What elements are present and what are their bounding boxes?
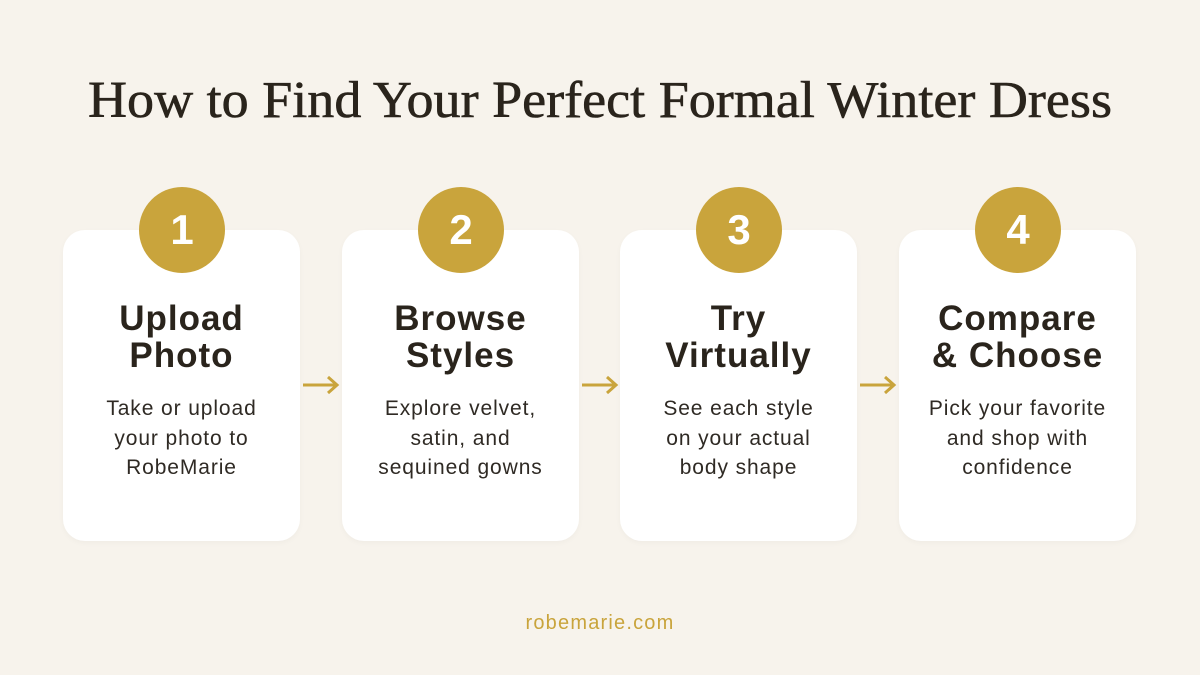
text 4: and shop with bbox=[947, 426, 1088, 450]
heading 3 bbox=[665, 299, 812, 375]
arrow 3 bbox=[860, 376, 896, 394]
heading 1 bbox=[119, 299, 244, 375]
text 4: confidence bbox=[962, 456, 1073, 479]
badge 1: 1 bbox=[170, 206, 194, 253]
text 1: RobeMarie bbox=[126, 456, 237, 479]
panel: step 4 bbox=[899, 230, 1136, 541]
heading 4: & Choose bbox=[932, 336, 1103, 375]
text 2 bbox=[378, 397, 543, 479]
text 3 bbox=[663, 397, 814, 479]
arrow 2 bbox=[582, 376, 618, 394]
text 4 bbox=[929, 397, 1106, 479]
badge 4 bbox=[975, 187, 1061, 273]
heading 2 bbox=[394, 299, 527, 375]
badge 3 bbox=[696, 187, 782, 273]
panel: step 1 bbox=[63, 230, 300, 541]
panel: step 3 bbox=[620, 230, 857, 541]
text 3: body shape bbox=[680, 456, 797, 479]
arrow 1 bbox=[303, 376, 340, 394]
text 4: Pick your favorite bbox=[929, 397, 1106, 420]
panel: step 2 bbox=[342, 230, 579, 541]
text 1: Take or upload bbox=[106, 397, 257, 420]
badge 2 bbox=[418, 187, 504, 273]
heading 4 bbox=[932, 299, 1103, 375]
footer: robemarie.com bbox=[526, 612, 674, 634]
text 2: Explore velvet, bbox=[385, 397, 536, 420]
heading 4: Compare bbox=[938, 299, 1097, 338]
heading 1: Photo bbox=[129, 336, 234, 375]
badge 2: 2 bbox=[449, 206, 473, 253]
badge 3: 3 bbox=[727, 206, 751, 253]
heading 2: Styles bbox=[406, 336, 515, 375]
badge 1 bbox=[139, 187, 225, 273]
badge 4: 4 bbox=[1006, 206, 1030, 253]
text 1 bbox=[106, 397, 257, 479]
text 3: on your actual bbox=[666, 426, 811, 450]
text 1: your photo to bbox=[114, 426, 249, 450]
heading 2: Browse bbox=[394, 299, 527, 338]
text 2: satin, and bbox=[410, 426, 511, 450]
text 3: See each style bbox=[663, 397, 814, 420]
text 2: sequined gowns bbox=[378, 456, 543, 479]
heading 3: Try bbox=[711, 299, 766, 338]
title: How to Find Your Perfect Formal Winter Dress bbox=[88, 72, 1112, 129]
heading 1: Upload bbox=[119, 299, 244, 338]
heading 3: Virtually bbox=[665, 336, 812, 375]
